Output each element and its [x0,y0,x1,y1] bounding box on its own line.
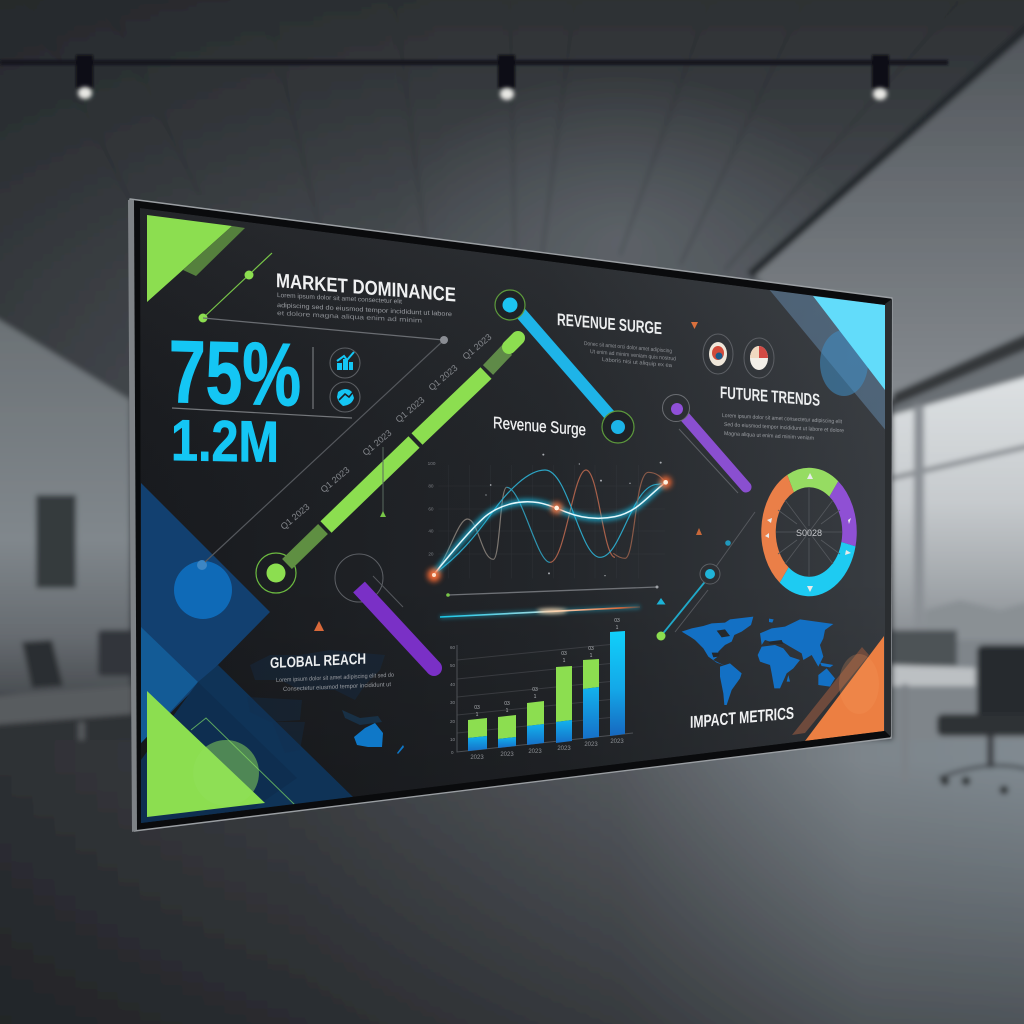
chart y labels: 50 [450,663,456,668]
bar x labels: 2023 [528,749,542,755]
heading: market dominance: MARKET DOMINANCE [276,270,456,306]
bar value labels: 03 [504,701,510,707]
bar x labels: 2023 [500,752,514,758]
timeline quarter labels: Q1 2023 [279,502,312,532]
bar 2 [498,715,516,748]
blue connector bar [495,290,634,443]
right chair [977,645,1024,720]
dim world map behind global reach [247,650,385,753]
donut center label: S0028 [796,528,822,538]
ceiling track and fixtures [0,55,948,88]
left lower room [0,700,132,850]
heading: impact metrics: IMPACT METRICS [690,704,794,732]
bar 1 [468,718,487,751]
heading: future trends [720,383,844,442]
monitor bezel [130,199,892,831]
icon: trend badge [330,382,360,412]
icon: chart badge [330,348,360,378]
green timeline bar [256,338,518,593]
metallic left edge [128,200,137,832]
bar value labels: 03 [588,646,594,652]
connector lines and nodes [198,253,448,562]
timeline quarter labels: Q1 2023 [461,332,494,362]
bar value labels: 03 [474,705,480,711]
heading: market dominance: Lorem ipsum dolor sit amet consectetur elit [277,292,402,306]
chart y labels: 30 [450,700,456,705]
bar x labels: 2023 [610,739,624,745]
bar value labels: 1 [476,712,479,718]
orange corner triangles [792,636,884,741]
chart glow curve [433,482,666,575]
floor [0,740,1024,1024]
bar 4 [556,666,572,743]
map water details [712,629,783,657]
australia highlight [342,710,404,754]
timeline quarter labels: Q1 2023 [427,363,460,393]
bar x labels [470,739,624,761]
heading: market dominance [276,270,456,325]
chart axis labels: 80 [428,484,434,489]
chart y labels: 60 [450,645,456,650]
metric: 75%: 75% [169,321,301,425]
chart axis labels [428,462,436,556]
metric: 1.2M: 1.2M [171,408,279,475]
skyline [925,600,1024,640]
ceiling centre glow [390,70,850,410]
heading: future trends: Lorem ipsum dolor sit amet consectetur adipiscing elit [722,413,842,425]
bar 5 [583,659,599,739]
icon: red pie badge [703,334,733,374]
bar 6 [610,631,625,736]
chart axis labels: 100 [428,461,436,466]
left wall [0,308,130,694]
heading: future trends: FUTURE TRENDS [720,383,820,410]
timeline quarter labels [279,332,494,532]
purple connector bar [662,394,746,493]
bar value labels: 03 [614,618,620,624]
heading: market dominance: et dolore magna aliqua enim ad minim [277,310,422,325]
left table [0,686,132,726]
chart main curve [433,482,666,575]
icon: orange triangle [314,621,324,631]
right wall below window [893,630,1024,740]
bar value labels: 1 [563,658,566,664]
bar value labels: 1 [506,708,509,714]
heading: market dominance: adipiscing sed do eiusmod tempor incididunt ut labore [277,302,452,318]
window [893,365,1024,640]
line chart [427,454,672,582]
chart y labels [450,645,456,755]
chart y labels: 20 [450,719,456,724]
donut spokes [776,487,842,577]
chart axis labels: 20 [428,552,434,557]
chart y labels: 10 [450,737,456,742]
icon: pie badge [744,338,774,378]
right desk items [893,630,957,666]
bar value labels: 1 [534,694,537,700]
timeline quarter labels: Q1 2023 [361,428,394,458]
chart baseline [446,586,658,597]
heading: revenue surge: Laboris nisi ut aliquip ex ea [602,357,673,369]
bar value labels: 03 [561,651,567,657]
bar value labels: 1 [616,625,619,631]
heading: future trends: Magna aliqua ut enim ad minim veniam [724,431,814,442]
window mullions [893,445,1024,478]
bar x labels: 2023 [584,742,598,748]
bar value labels: 03 [532,687,538,693]
ceiling panel seams [30,0,960,270]
icon: cyan marker [656,598,666,604]
world map [682,617,835,705]
left chairs [22,640,63,688]
chart glow points [427,476,672,582]
timeline quarter labels: Q1 2023 [319,465,352,495]
heading: global reach [270,651,395,693]
window soffit [893,325,1024,415]
ceiling diagonal beam [750,22,1024,275]
bar value labels [474,618,620,718]
bar 3 [527,701,544,745]
heading: revenue surge: Donec sit amet orci dolor amet adipiscing [584,341,672,355]
icon: orange marker [691,322,698,329]
cyan connector [656,512,755,640]
metric divider [172,347,352,418]
chart axis labels: 40 [428,529,434,534]
bar value labels: 1 [590,653,593,659]
ceiling light glows [78,87,887,100]
chart y labels: 40 [450,682,456,687]
screen [140,208,892,825]
bar chart [450,618,633,761]
purple lower bar [335,554,442,676]
top left green triangle [147,215,245,302]
chart axis labels: 60 [428,507,434,512]
heading: future trends: Sed do eiusmod tempor incididunt ut labore et dolore [724,422,844,434]
heading: revenue surge: Ut enim ad minim veniam quis nostrud [590,349,676,363]
bottom left geometric shapes [141,483,353,825]
chart axes [457,643,633,752]
heading: global reach: Lorem ipsum dolor sit amet adipiscing elit sed do [276,673,395,684]
right bezel [885,299,892,737]
heading: revenue surge chart: Revenue Surge [493,413,586,439]
right ceiling section [752,15,1024,400]
heading: revenue surge: REVENUE SURGE [557,310,662,338]
glowing progress line [440,607,640,617]
display monitor [128,199,892,832]
chart y labels: 0 [451,750,454,755]
left picture [36,495,76,588]
donut chart [765,473,852,592]
timeline quarter labels: Q1 2023 [394,395,427,425]
donut arrows [765,473,851,592]
bar x labels: 2023 [470,755,484,761]
right table [893,665,975,686]
chart grid [448,465,638,578]
chart waves [435,470,666,573]
timeline tick [380,447,386,517]
heading: revenue surge [557,310,676,369]
heading: global reach: Consectetur eiusmod tempor incididunt ut [283,682,391,693]
bar x labels: 2023 [557,746,571,752]
small orange marker [696,528,702,535]
heading: global reach: GLOBAL REACH [270,651,366,672]
ceiling [0,0,1024,400]
top right geometric shapes [770,290,885,430]
chart scatter dots [485,454,662,576]
